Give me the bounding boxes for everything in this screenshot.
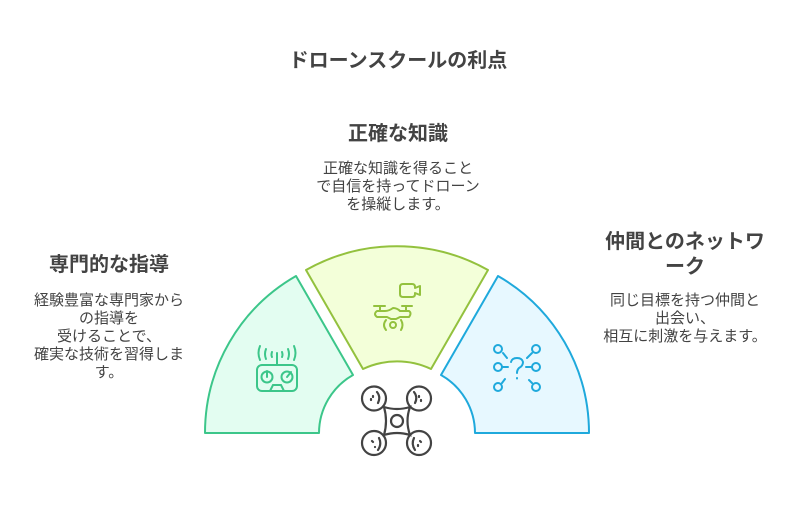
title: ドローンスクールの利点: [289, 50, 507, 72]
text block: expert instruction: 経験豊富な専門家から: [34, 292, 184, 309]
text block: network of peers: [603, 292, 767, 345]
text block: expert instruction: の指導を: [79, 310, 139, 327]
panel: left sector (green): [205, 276, 353, 433]
panel: right sector (blue): [441, 276, 589, 433]
text block: accurate knowledge: を操縦します。: [346, 196, 450, 213]
icon: central drone: [362, 386, 431, 455]
text block: network of peers: 出会い、: [655, 310, 715, 327]
heading: network of peers: [605, 230, 765, 278]
text block: network of peers: 相互に刺激を与えます。: [603, 328, 767, 345]
heading: expert instruction: 専門的な指導: [49, 254, 169, 276]
text block: accurate knowledge: 正確な知識を得ること: [323, 160, 473, 177]
text block: expert instruction: 受けることで、: [57, 328, 161, 345]
icon: network with question mark: [494, 345, 540, 391]
text block: expert instruction: す。: [95, 364, 123, 381]
text block: accurate knowledge: [316, 160, 480, 213]
icon: camera drone: [374, 284, 420, 330]
heading: accurate knowledge: 正確な知識: [348, 123, 448, 145]
heading: network of peers: 仲間とのネットワ: [605, 231, 765, 253]
panel: middle sector (lime): [306, 246, 488, 369]
text block: expert instruction: 確実な技術を習得しま: [34, 346, 184, 363]
heading: network of peers: ーク: [665, 256, 705, 278]
text block: accurate knowledge: で自信を持ってドローン: [316, 178, 480, 195]
text block: expert instruction: [34, 292, 184, 381]
icon: remote controller: [257, 346, 297, 391]
text block: network of peers: 同じ目標を持つ仲間と: [610, 292, 760, 309]
